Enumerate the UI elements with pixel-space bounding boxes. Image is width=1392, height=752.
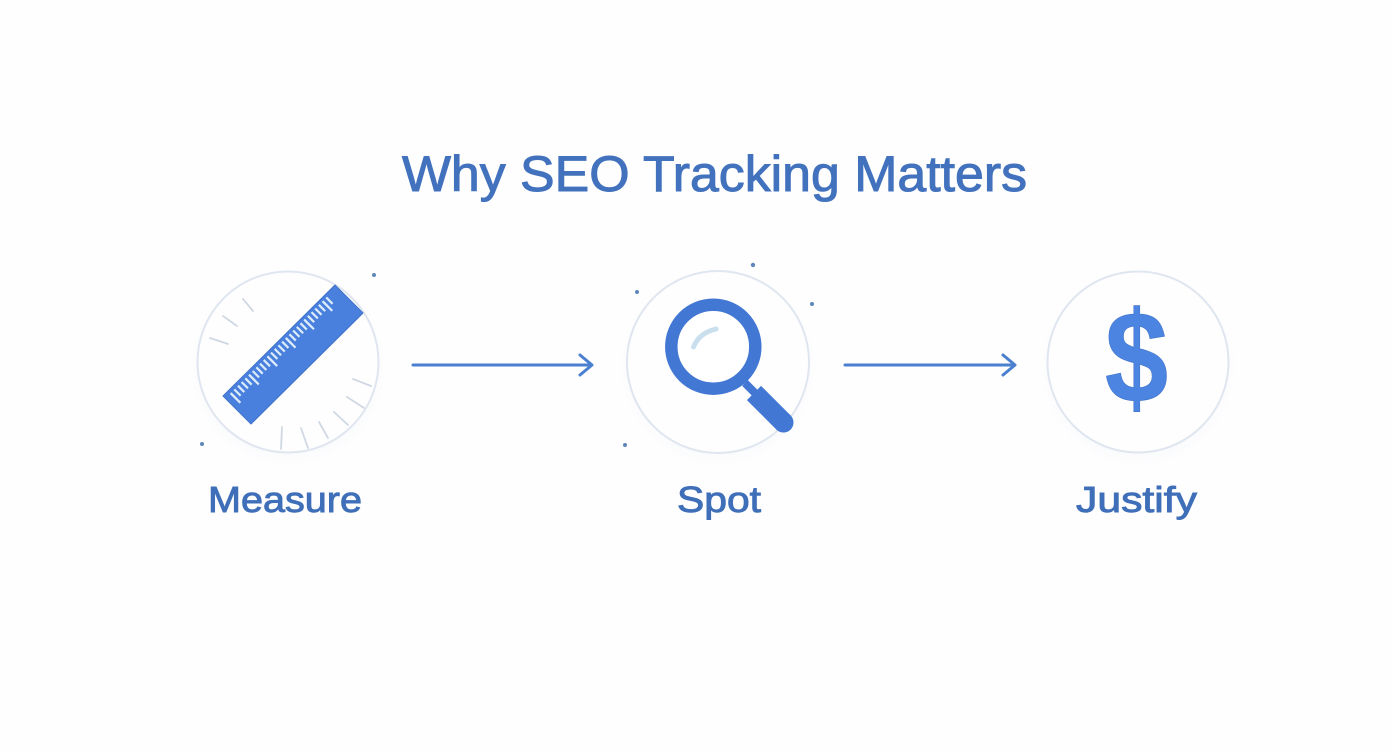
label: measure: Measure	[208, 479, 362, 520]
arrow: measure to spot	[413, 355, 592, 375]
decorative dots: spot	[623, 263, 814, 447]
step: justify	[1048, 272, 1228, 520]
label: justify: Justify	[1076, 479, 1197, 520]
circle: justify	[1048, 272, 1228, 458]
icon: ruler	[223, 285, 363, 424]
circle: measure	[198, 272, 378, 458]
step: spot	[627, 271, 809, 520]
radial tick marks	[210, 299, 371, 449]
arrow: spot to justify	[845, 355, 1015, 375]
title: Why SEO Tracking Matters	[402, 146, 1027, 202]
label: spot: Spot	[677, 479, 761, 520]
circle: spot	[627, 271, 809, 458]
icon: dollar sign: $	[1105, 284, 1168, 430]
step: measure	[198, 272, 378, 520]
icon: magnifying glass	[671, 305, 794, 432]
decorative dots: measure	[200, 273, 376, 446]
